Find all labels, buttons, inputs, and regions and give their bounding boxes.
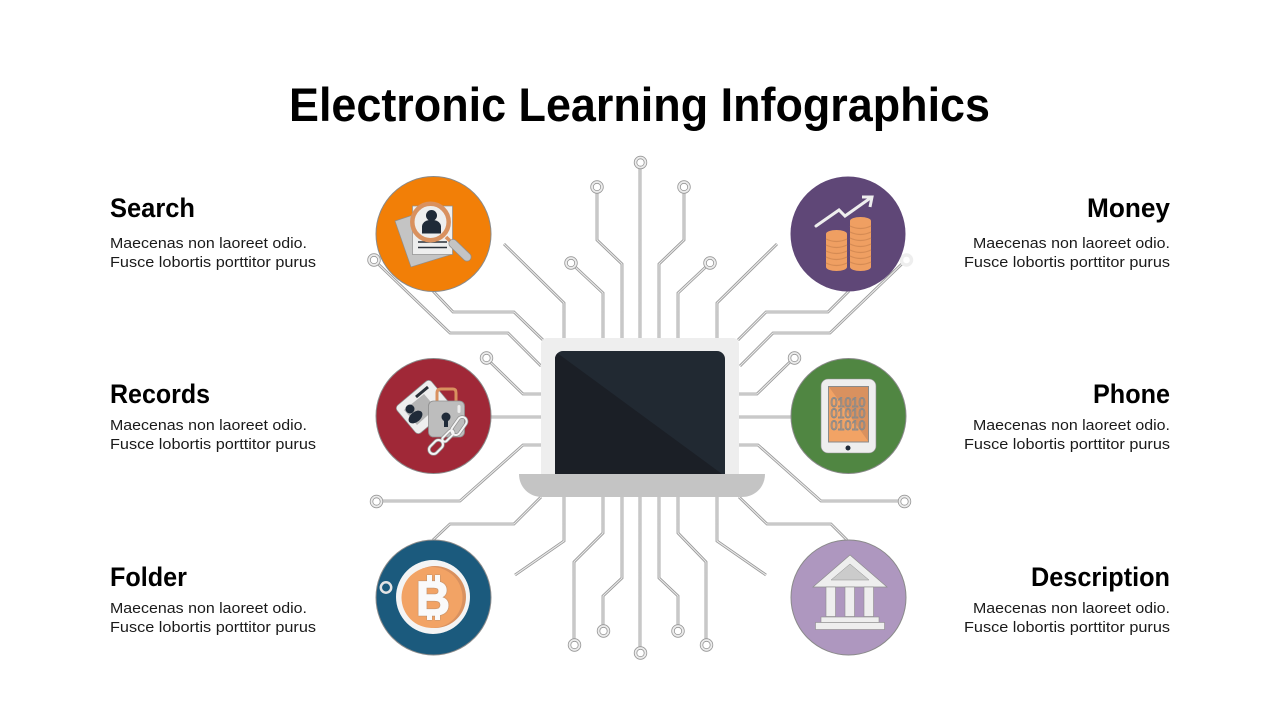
- icon: description bank circle: [791, 540, 906, 655]
- id card: [395, 379, 452, 435]
- text block: Search: Maecenas non laoreet odio.: [110, 235, 307, 252]
- title: Electronic Learning Infographics: [289, 78, 990, 131]
- text block: Phone: Phone: [1093, 379, 1170, 409]
- icon: phone circle: 01010: [830, 395, 866, 410]
- icon: phone circle: [791, 358, 906, 474]
- text block: Phone: Maecenas non laoreet odio.: [973, 417, 1170, 434]
- text block: Description: [964, 562, 1170, 636]
- text block: Folder: Fusce lobortis porttitor purus: [110, 619, 316, 636]
- trace end nodes: [369, 158, 912, 658]
- text block: Search: Fusce lobortis porttitor purus: [110, 254, 316, 271]
- text block: Folder: Maecenas non laoreet odio.: [110, 600, 307, 617]
- text block: Money: Fusce lobortis porttitor purus: [964, 254, 1170, 271]
- icon: records circle: [376, 358, 491, 474]
- text block: Phone: [964, 379, 1170, 453]
- text block: Records: Maecenas non laoreet odio.: [110, 417, 307, 434]
- text block: Phone: Fusce lobortis porttitor purus: [964, 436, 1170, 453]
- text block: Description: Fusce lobortis porttitor purus: [964, 619, 1170, 636]
- text block: Folder: Folder: [110, 562, 187, 592]
- text block: Money: Money: [1087, 193, 1170, 223]
- laptop screen: [555, 351, 725, 474]
- icon: search circle: [376, 176, 491, 292]
- text block: Money: [964, 193, 1170, 271]
- text block: Description: Maecenas non laoreet odio.: [973, 600, 1170, 617]
- laptop body: [541, 338, 739, 474]
- text block: Records: Fusce lobortis porttitor purus: [110, 436, 316, 453]
- icon: phone circle: 01010: [830, 406, 866, 421]
- icon: money circle: [790, 176, 906, 292]
- icon: folder bitcoin circle: [376, 540, 491, 655]
- chain: [427, 415, 468, 456]
- laptop base: [519, 474, 765, 497]
- text block: Search: [110, 193, 316, 271]
- icon: phone circle: 01010: [830, 418, 866, 433]
- screen shadow: [555, 353, 722, 474]
- circuit traces: [374, 162, 906, 653]
- text block: Description: Description: [1031, 562, 1170, 592]
- text block: Records: Records: [110, 379, 210, 409]
- text block: Records: [110, 379, 316, 453]
- text block: Folder: [110, 562, 316, 636]
- bitcoin symbol: B: [416, 573, 450, 626]
- laptop: [519, 338, 765, 497]
- text block: Search: Search: [110, 193, 195, 223]
- text block: Money: Maecenas non laoreet odio.: [973, 235, 1170, 252]
